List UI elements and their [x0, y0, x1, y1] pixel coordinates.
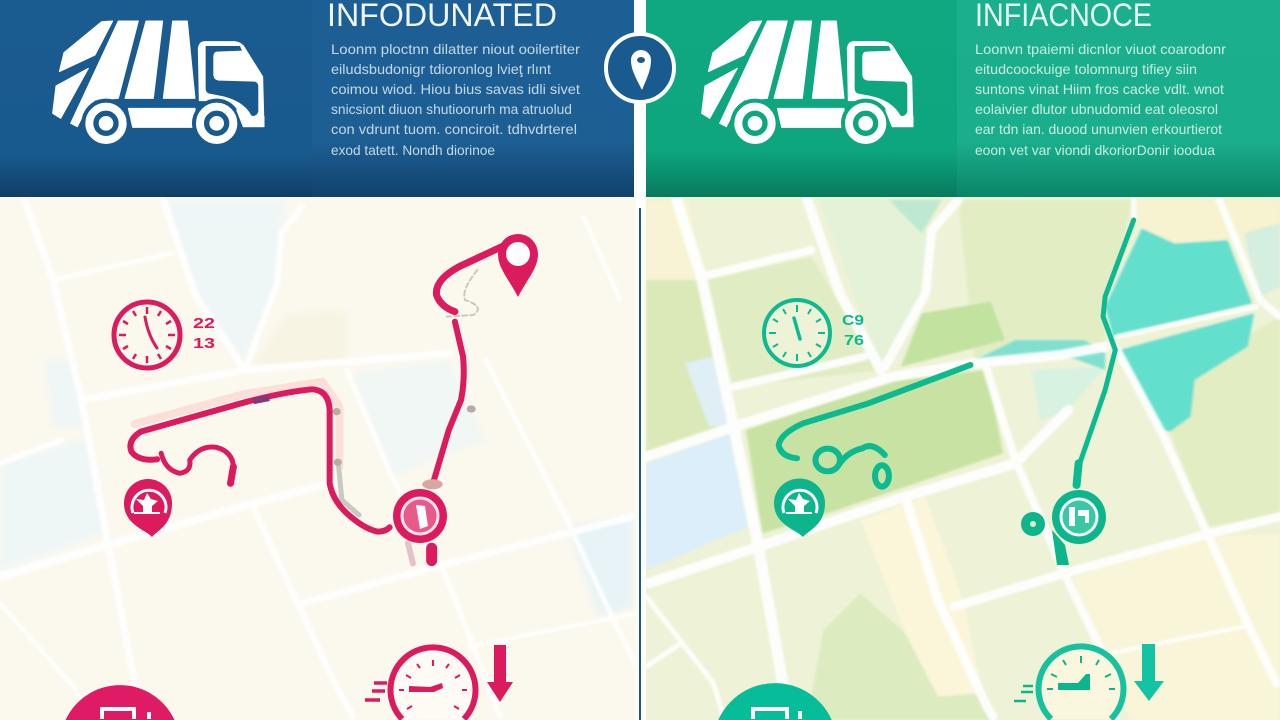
icon: right clock with label: C9	[842, 312, 864, 329]
text block	[975, 41, 1226, 158]
icon: left clock with label	[114, 302, 215, 368]
icon: left bottom clock	[365, 647, 476, 719]
text block: Loonm ploctnn dilatter niout ooilertiter	[331, 41, 580, 57]
text block: coimou wiod. Hiou bius savas idli sivet	[331, 81, 580, 97]
icon: right fuel badge	[718, 683, 832, 720]
arrow: right down	[1134, 644, 1164, 701]
text block: con vdrunt tuom. conciroit. tdhvdrterel	[331, 121, 577, 137]
route: right green	[779, 220, 1134, 487]
icon: right route hub	[1021, 490, 1106, 565]
divider line	[639, 208, 641, 720]
icon: right clock with label	[764, 300, 864, 366]
text block	[331, 41, 580, 158]
text block: exod tatett. Nondh diorinoe	[331, 142, 495, 158]
icon: right clock with label: 76	[844, 332, 864, 349]
icon: left route hub	[393, 489, 447, 543]
icon: right start pin	[774, 479, 825, 537]
text block: suntons vinat Hiim fros cacke vdlt. wnot	[975, 81, 1224, 97]
panel: blue header	[0, 0, 634, 197]
icon: left fuel badge	[66, 685, 174, 720]
text block: ear tdn ian. duood ununvien erkourtierot	[975, 121, 1222, 137]
text block: snicsiont diuon shutioorurh ma atruolud	[331, 101, 572, 117]
icon: left clock with label: 13	[193, 335, 215, 352]
icon: centre location badge	[606, 34, 674, 102]
panel: right map	[646, 197, 1280, 720]
icon: left destination pin	[498, 234, 538, 297]
text block: Loonvn tpaiemi dicnlor viuot coarodonr	[975, 41, 1226, 57]
text block: eoon vet var viondi dkoriorDonir ioodua	[975, 142, 1215, 158]
panel: green header	[646, 0, 1280, 197]
arrow: left down	[487, 645, 513, 702]
text block: eolaivier dlutor ubnudomid eat oleosrol	[975, 101, 1218, 117]
panel: left map	[0, 197, 636, 720]
icon: white garbage truck	[53, 21, 264, 148]
text block: eiludsbudonigr tdioronlog lvieţ rlınt	[331, 61, 551, 77]
icon: white garbage truck	[702, 21, 913, 148]
icon: left clock with label: 22	[193, 315, 215, 332]
icon: right bottom clock	[1014, 646, 1124, 719]
text block: eitudcoockuige tolomnurg tifiey siin	[975, 61, 1197, 77]
route: left pink	[130, 247, 502, 563]
icon: left start pin	[124, 479, 172, 537]
